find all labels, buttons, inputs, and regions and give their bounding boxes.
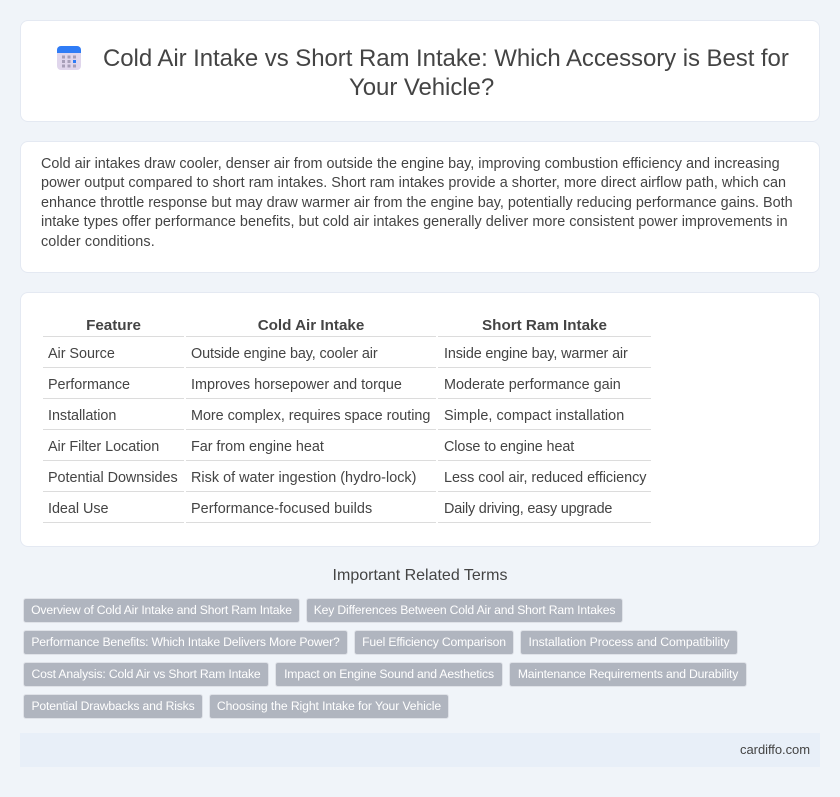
row: performance: Moderate performance gain (444, 377, 621, 393)
tag (23, 694, 203, 719)
panel: header (20, 20, 820, 122)
tag (23, 662, 269, 687)
title: Cold Air Intake vs Short Ram Intake: Which Accessory is Best for (103, 45, 789, 72)
panel: comparison table (20, 292, 820, 547)
row: ideal use: Daily driving, easy upgrade (444, 501, 612, 517)
table header (86, 317, 607, 334)
row: installation: Simple, compact installation (444, 408, 624, 424)
row: air source: Inside engine bay, warmer air (444, 346, 628, 362)
tag (275, 662, 503, 687)
intro text: intake types offer performance benefits, but cold air intakes generally deliver more consistent power improvements in (41, 214, 788, 230)
tag: Overview of Cold Air Intake and Short Ram Intake (31, 603, 292, 617)
tag: Potential Drawbacks and Risks (31, 699, 195, 713)
title: Your Vehicle? (349, 74, 494, 101)
intro text (41, 156, 793, 250)
tag (23, 630, 348, 655)
tag (354, 630, 514, 655)
tag (306, 598, 623, 623)
row: installation: Installation (48, 408, 116, 424)
table header: Cold Air Intake (258, 317, 364, 334)
row: potential downsides: Less cool air, reduced efficiency (444, 470, 646, 486)
row: installation (48, 408, 624, 424)
row: air filter location: Far from engine heat (191, 439, 324, 455)
tag: Choosing the Right Intake for Your Vehicle (217, 699, 441, 713)
row: ideal use (48, 501, 612, 517)
row: performance: Improves horsepower and torque (191, 377, 402, 393)
row: air filter location: Air Filter Location (48, 439, 159, 455)
row: potential downsides (48, 470, 646, 486)
tag: Performance Benefits: Which Intake Delivers More Power? (31, 635, 340, 649)
tag (23, 598, 300, 623)
tag: Cost Analysis: Cold Air vs Short Ram Intake (31, 667, 261, 681)
intro text: enhance throttle response but may draw warmer air from the engine bay, potentially reducing performance gains. Both (41, 195, 793, 211)
row: performance: Performance (48, 377, 130, 393)
row: potential downsides: Risk of water ingestion (hydro-lock) (191, 470, 416, 486)
table (43, 317, 651, 523)
intro text: power output compared to short ram intakes. Short ram intakes provide a shorter, more direct airflow path, which can (41, 175, 786, 191)
row: ideal use: Ideal Use (48, 501, 108, 517)
row: air filter location: Close to engine heat (444, 439, 574, 455)
row: air filter location (48, 439, 574, 455)
tag (209, 694, 449, 719)
tag: Maintenance Requirements and Durability (518, 667, 738, 681)
tag (520, 630, 738, 655)
row: ideal use: Performance-focused builds (191, 501, 372, 517)
row: air source: Air Source (48, 346, 115, 362)
tag: Key Differences Between Cold Air and Short Ram Intakes (314, 603, 615, 617)
icon: calendar (57, 46, 81, 70)
related term tags (23, 598, 747, 719)
tag (509, 662, 747, 687)
intro text: Cold air intakes draw cooler, denser air from outside the engine bay, improving combustion efficiency and increasing (41, 156, 780, 172)
intro text: colder conditions. (41, 234, 155, 250)
table header: Short Ram Intake (482, 317, 607, 334)
footer source: cardiffo.com (740, 742, 810, 757)
row: air source (48, 346, 628, 362)
tag: Installation Process and Compatibility (528, 635, 730, 649)
tag: Fuel Efficiency Comparison (362, 635, 506, 649)
row: air source: Outside engine bay, cooler air (191, 346, 378, 362)
table header: Feature (86, 317, 141, 334)
title (103, 45, 789, 101)
row: potential downsides: Potential Downsides (48, 470, 178, 486)
tag: Impact on Engine Sound and Aesthetics (284, 667, 494, 681)
row: performance (48, 377, 621, 393)
footer bar (20, 733, 820, 767)
row: installation: More complex, requires space routing (191, 408, 430, 424)
heading: important related terms: Important Related Terms (333, 567, 507, 584)
panel: intro (20, 141, 820, 273)
